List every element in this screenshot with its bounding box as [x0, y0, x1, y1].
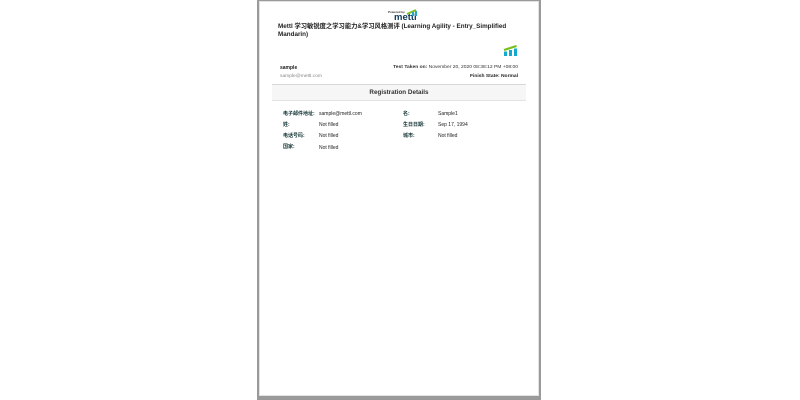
registration details table: Sep 17, 1994	[438, 122, 468, 128]
registration details table	[283, 110, 468, 151]
registration details table: Not filled	[438, 133, 457, 139]
registration details table: 生日日期:	[403, 122, 425, 128]
test taken timestamp: Test Taken on: November 20, 2020 08:38:12 PM +08:00	[393, 65, 518, 70]
registration details table: 电子邮件地址:	[283, 111, 315, 117]
registration details table: 姓:	[283, 122, 290, 128]
registration details table: 名:	[403, 111, 410, 117]
registration details table: 国家:	[283, 144, 295, 150]
panel: report page	[257, 0, 541, 400]
registration details table: sample@mettl.com	[319, 111, 362, 117]
icon: powered by mettl logo: mettl	[394, 12, 417, 22]
title: Mettl 学习敏锐度之学习能力&学习风格测评 (Learning Agility - Entry_Simplified Mandarin)	[278, 23, 506, 38]
registration details table: 城市:	[403, 133, 415, 139]
icon: mettl bar chart mark	[504, 45, 517, 56]
candidate name: sample	[280, 65, 297, 71]
section heading: registration details	[272, 84, 526, 101]
registration details table: Not filled	[319, 145, 338, 151]
icon: powered by mettl logo	[388, 9, 417, 22]
icon: powered by mettl logo: Powered by	[388, 10, 405, 14]
section heading: registration details: Registration Details	[369, 89, 429, 96]
candidate email: sample@mettl.com	[280, 74, 322, 79]
registration details table: 电话号码:	[283, 133, 305, 139]
registration details table: Not filled	[319, 122, 338, 128]
registration details table: Not filled	[319, 133, 338, 139]
finish state: Finish State: Normal	[470, 74, 518, 79]
registration details table: Sample1	[438, 111, 458, 117]
